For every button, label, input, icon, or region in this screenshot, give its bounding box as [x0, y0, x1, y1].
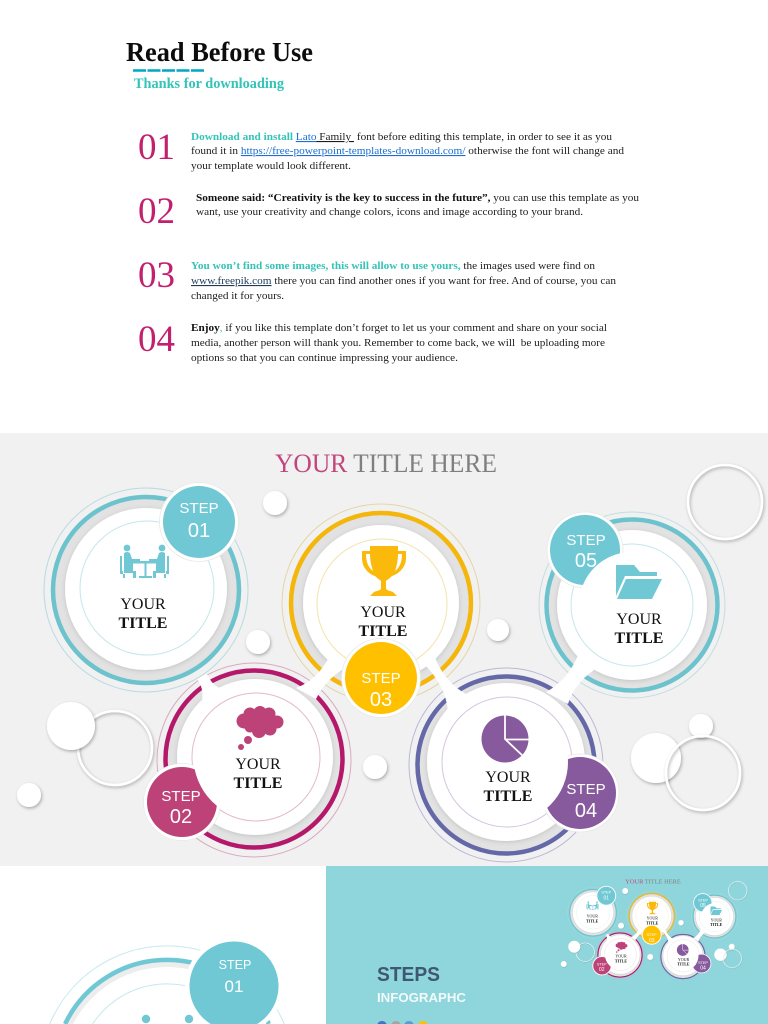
- panel: gray background: [0, 433, 768, 866]
- badge: step 01: 01: [188, 520, 210, 542]
- connectors: [197, 655, 594, 712]
- icon: thought cloud: [236, 706, 284, 750]
- badge: step 01: [160, 482, 238, 562]
- badge: step 04: [446, 701, 619, 832]
- badge: step 02: STEP: [161, 788, 201, 805]
- badge: step 03: STEP: [361, 670, 401, 687]
- badge: step 04: STEP: [566, 781, 606, 798]
- cover subtitle: INFOGRAPHC: [377, 990, 467, 1005]
- item 04: 04: [138, 319, 175, 360]
- item 02: want, use your creativity and change colors, icons and image according to your brand.: [196, 206, 583, 218]
- item 03: changed it for yours.: [191, 290, 284, 302]
- badge: step 03: 03: [370, 689, 392, 711]
- item 02: [138, 191, 640, 232]
- badge: step 05: 05: [575, 550, 597, 572]
- item 04: options so that you can continue impressing your audience.: [191, 352, 458, 364]
- step 05 circle: YOUR: [616, 611, 662, 628]
- item 01: Download and install Lato Family font before editing this template, in order to see it as you: [191, 131, 612, 143]
- item 04: [138, 319, 607, 364]
- step 03 circle: [282, 504, 480, 702]
- item 03: 03: [138, 255, 175, 296]
- subtitle: Thanks for downloading: [134, 76, 285, 92]
- badge: step 01: STEP: [179, 500, 219, 517]
- step 05 circle: TITLE: [615, 630, 663, 647]
- step 04 circle: YOUR: [485, 769, 531, 786]
- title dashes: [133, 69, 204, 72]
- item 03: You won’t find some images, this will allow to use yours, the images used were find on: [191, 260, 596, 272]
- step 01 circle: [44, 482, 248, 692]
- badge: step 01 large: 01: [225, 977, 243, 996]
- title: Read Before Use: [126, 37, 313, 67]
- decorative bubbles: [17, 465, 762, 810]
- step 02 circle: TITLE: [234, 775, 282, 792]
- step 01 circle: TITLE: [119, 615, 167, 632]
- badge: step 05: [547, 512, 685, 658]
- item 01: [138, 127, 624, 172]
- item 04: Enjoy, if you like this template don’t forget to let us your comment and share on your social: [191, 322, 607, 334]
- badge: step 05: STEP: [566, 532, 606, 549]
- step 05 circle: [539, 512, 725, 698]
- badge: step 03: [342, 638, 420, 718]
- badge: step 02: 02: [170, 806, 192, 828]
- item 04: media, another person will thank you. Remember to come back, we will be uploading more: [191, 337, 605, 349]
- item 02: Someone said: “Creativity is the key to success in the future”, you can use this template as you: [196, 192, 640, 204]
- step 02 circle: YOUR: [235, 756, 281, 773]
- item 01: 01: [138, 127, 175, 168]
- item 01: found it in https://free-powerpoint-templates-download.com/ otherwise the font will change and: [191, 145, 624, 157]
- item 01: your template would look different.: [191, 160, 351, 172]
- panel: bottom left preview: [50, 937, 284, 1024]
- item 03: [138, 255, 617, 302]
- step 03 circle: YOUR: [360, 604, 406, 621]
- mini infographic: [561, 878, 747, 981]
- item 02: 02: [138, 191, 175, 232]
- step 02 circle: [144, 663, 351, 857]
- colour dots: [377, 1021, 428, 1024]
- step 01 circle: YOUR: [120, 596, 166, 613]
- badge: step 01 large: STEP: [219, 958, 251, 972]
- item 03: www.freepik.com there you can find another ones if you want for free. And of course, you can: [191, 275, 617, 287]
- badge: step 01 large: [185, 937, 283, 1024]
- step 04 circle: TITLE: [484, 788, 532, 805]
- badge: step 02: [144, 694, 318, 840]
- icon: people heads: [142, 1015, 193, 1023]
- icon: people at table: [120, 545, 169, 578]
- step 03 circle: TITLE: [359, 623, 407, 640]
- main heading: YOUR TITLE HERE: [275, 449, 497, 478]
- icon: pie chart: [482, 715, 529, 762]
- icon: trophy: [362, 546, 406, 596]
- step 04 circle: [409, 668, 619, 862]
- infographic: five steps: [17, 449, 762, 862]
- panel: teal cover: [326, 866, 768, 1024]
- section: read before use: [126, 37, 640, 364]
- icon: folder: [616, 565, 662, 599]
- cover title: STEPS: [377, 963, 440, 986]
- badge: step 04: 04: [575, 800, 597, 822]
